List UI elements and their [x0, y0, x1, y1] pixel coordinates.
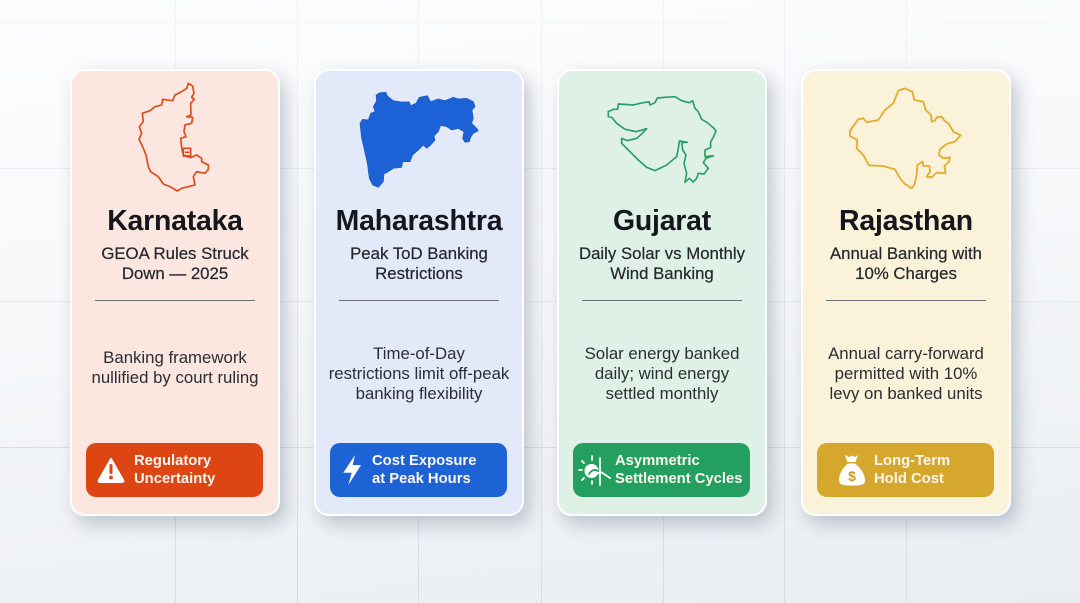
badge label: Asymmetric [615, 453, 700, 469]
badge label [874, 453, 950, 487]
map: Rajasthan outline [849, 87, 962, 190]
icon: money bag: $ [848, 468, 856, 484]
subtitle: Restrictions [375, 264, 463, 283]
subtitle: Down — 2025 [122, 264, 228, 283]
description [585, 344, 739, 403]
description: banking flexibility [356, 384, 482, 403]
badge label [372, 453, 476, 487]
map: Maharashtra filled [360, 92, 479, 188]
badge label: at Peak Hours [372, 471, 471, 487]
heading: Maharashtra: Maharashtra [336, 205, 502, 237]
description: permitted with 10% [835, 364, 977, 383]
map: Karnataka outline [138, 82, 210, 192]
heading: Gujarat: Gujarat [613, 205, 711, 237]
subtitle [101, 244, 249, 283]
badge label: Settlement Cycles [615, 471, 742, 487]
badge label: Hold Cost [874, 471, 944, 487]
panel: Rajasthan [801, 69, 1011, 516]
subtitle: Peak ToD Banking [350, 244, 488, 263]
description [329, 344, 510, 403]
badge label: Cost Exposure [372, 453, 476, 469]
subtitle: 10% Charges [855, 264, 957, 283]
subtitle [350, 244, 488, 283]
subtitle [830, 244, 982, 283]
subtitle [579, 244, 746, 283]
description: daily; wind energy [595, 364, 729, 383]
heading: Karnataka: Karnataka [107, 205, 243, 237]
description: Annual carry-forward [828, 344, 984, 363]
panel: Maharashtra [314, 69, 524, 516]
subtitle: Daily Solar vs Monthly [579, 244, 745, 263]
panel: Gujarat [557, 69, 767, 516]
icon: warning triangle [98, 458, 124, 483]
map: Gujarat outline [608, 96, 717, 184]
description: restrictions limit off-peak [329, 364, 509, 383]
panel: Karnataka [70, 69, 280, 516]
badge label [615, 453, 742, 487]
subtitle: Annual Banking with [830, 244, 982, 263]
description: Solar energy banked [585, 344, 739, 363]
icon: sun and wind turbine [578, 455, 611, 486]
description: levy on banked units [830, 384, 982, 403]
badge label: Uncertainty [134, 471, 215, 487]
description [92, 348, 258, 387]
description: Banking framework [103, 348, 247, 367]
badge: Asymmetric Settlement Cycles [573, 443, 750, 497]
badge: Cost Exposure at Peak Hours [330, 443, 507, 497]
badge label: Long-Term [874, 453, 950, 469]
description [828, 344, 984, 403]
description: Time-of-Day [373, 344, 465, 363]
badge label [134, 453, 216, 487]
heading: Rajasthan: Rajasthan [839, 205, 973, 237]
description: settled monthly [606, 384, 718, 403]
badge: Long-Term Hold Cost [817, 443, 994, 497]
icon: money bag [839, 455, 865, 486]
subtitle: Wind Banking [610, 264, 714, 283]
badge label: Regulatory [134, 453, 211, 469]
description: nullified by court ruling [92, 368, 258, 387]
badge: Regulatory Uncertainty [86, 443, 263, 497]
icon: lightning bolt [343, 455, 361, 485]
subtitle: GEOA Rules Struck [101, 244, 249, 263]
